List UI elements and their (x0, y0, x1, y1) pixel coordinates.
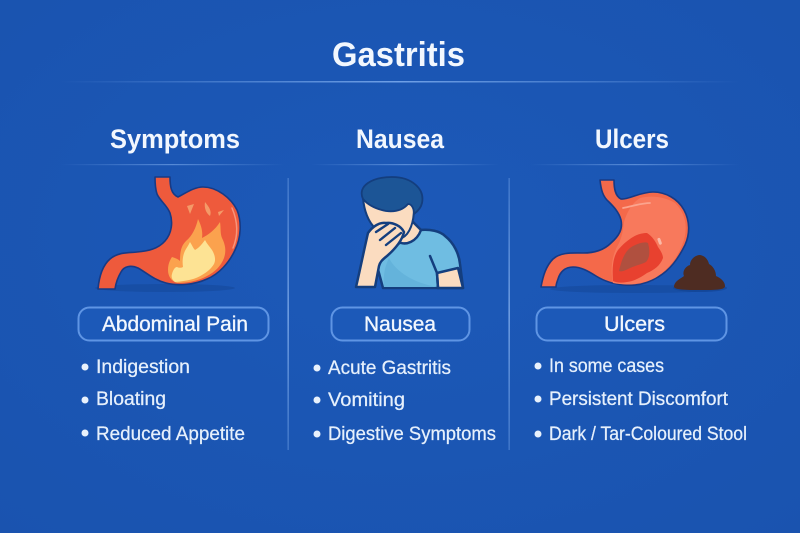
icon: dark stool (673, 255, 727, 292)
title: Gastritis (332, 36, 465, 74)
list: ulcers (534, 356, 747, 445)
list: symptoms: Indigestion (96, 357, 190, 378)
label pill: ulcers: Ulcers (604, 313, 665, 336)
label pill: nausea: Nausea (364, 313, 436, 336)
list: nausea: Vomiting (328, 390, 405, 411)
panel: ulcers (534, 124, 747, 445)
icon: stomach with ulcer (541, 180, 720, 293)
label pill: ulcers (536, 308, 726, 340)
list: ulcers: Persistent Discomfort (549, 389, 729, 410)
panel: nausea (314, 124, 496, 445)
list: symptoms: Bloating (96, 389, 166, 410)
heading: nausea: Nausea (356, 124, 445, 154)
list: nausea (314, 358, 496, 445)
list: symptoms (82, 357, 245, 445)
heading: symptoms: Symptoms (110, 124, 240, 154)
list: nausea: Digestive Symptoms (328, 424, 496, 445)
ulcer lesion (613, 233, 663, 283)
label pill: abdominal pain: Abdominal Pain (102, 313, 248, 336)
icon: nauseous person (356, 177, 463, 288)
heading: ulcers: Ulcers (595, 124, 669, 154)
panel: symptoms (78, 124, 268, 445)
label pill: abdominal pain (78, 308, 268, 340)
label pill: nausea (332, 308, 470, 340)
list: symptoms: Reduced Appetite (96, 424, 245, 445)
icon: stomach with flame (95, 177, 240, 292)
list: ulcers: Dark / Tar-Coloured Stool (549, 424, 747, 445)
list: ulcers: In some cases (549, 356, 664, 377)
list: nausea: Acute Gastritis (328, 358, 451, 379)
icon: flame (168, 219, 225, 283)
